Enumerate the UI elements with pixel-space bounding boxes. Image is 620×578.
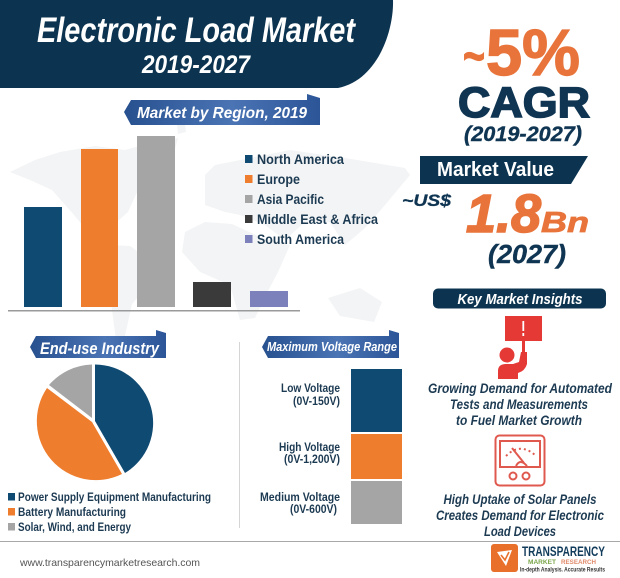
logo subtitle: MARKET <box>528 559 556 566</box>
market value banner: Market Value <box>437 159 554 181</box>
CAGR percentage: 5% <box>486 16 580 89</box>
voltage labels: High Voltage <box>279 440 340 454</box>
legend: end-use industry: Solar, Wind, and Energy <box>18 522 132 534</box>
market value banner <box>420 156 588 184</box>
ribbon: end-use industry <box>30 330 166 358</box>
voltage labels: Medium Voltage <box>260 490 340 504</box>
stacked bar: maximum voltage range <box>351 369 402 524</box>
icon: person holding alert sign <box>498 316 542 379</box>
slice: power supply equipment manufacturing <box>95 364 153 473</box>
ribbon: maximum voltage range: Maximum Voltage Range <box>267 339 397 354</box>
ribbon: market by region: Market by Region, 2019 <box>137 105 307 122</box>
ribbon: maximum voltage range <box>262 330 399 358</box>
insight text: solar panels <box>436 492 604 539</box>
logo: transparency market research <box>491 544 606 574</box>
segment: low voltage <box>351 369 402 432</box>
currency label: ~US$ <box>402 191 452 210</box>
header banner <box>0 0 393 88</box>
segment: medium voltage <box>351 481 402 524</box>
legend: end-use industry: Battery Manufacturing <box>18 507 126 519</box>
insight text: automated tests: to Fuel Market Growth <box>456 413 582 428</box>
segment: high voltage <box>351 434 402 479</box>
ribbon: end-use industry: End-use Industry <box>40 339 160 358</box>
CAGR callout <box>458 16 590 146</box>
slice: solar, wind and energy <box>49 364 92 418</box>
key market insights heading: Key Market Insights <box>458 291 582 308</box>
website url: www.transparencymarketresearch.com <box>19 557 200 569</box>
unit: Bn <box>541 207 589 239</box>
ribbon: market by region <box>124 94 320 125</box>
logo tagline: In-depth Analysis. Accurate Results <box>520 568 606 574</box>
subtitle years: 2019-2027 <box>141 51 251 79</box>
voltage labels: Low Voltage <box>281 381 340 395</box>
legend: regions: Europe <box>257 172 300 187</box>
insight text: automated tests: Tests and Measurements <box>450 397 588 412</box>
voltage labels: (0V-600V) <box>290 502 337 516</box>
legend: end-use industry: Power Supply Equipment Manufacturing <box>18 492 211 504</box>
bar: Middle East and Africa <box>193 282 231 307</box>
legend: regions: Middle East & Africa <box>257 212 378 227</box>
pie chart: end-use industry <box>37 364 153 480</box>
logo mark <box>491 544 518 572</box>
bar: North America <box>24 207 62 307</box>
legend: regions: North America <box>257 152 344 167</box>
bar: Asia Pacific <box>137 136 175 307</box>
bar: South America <box>250 291 288 307</box>
value: 1.8 <box>466 184 541 244</box>
world map background <box>10 116 410 340</box>
legend: regions: South America <box>257 232 344 247</box>
voltage labels <box>260 381 340 516</box>
bar: Europe <box>81 149 118 307</box>
logo subtitle <box>528 559 596 566</box>
icon: analog meter <box>496 436 544 486</box>
CAGR period: (2019-2027) <box>464 123 582 146</box>
legend: regions <box>245 152 378 247</box>
title: Electronic Load Market <box>37 11 356 50</box>
slice: battery manufacturing <box>37 388 122 480</box>
voltage labels: (0V-1,200V) <box>284 452 340 466</box>
legend: regions: Asia Pacific <box>257 192 324 207</box>
insight text: solar panels: Load Devices <box>484 524 556 539</box>
CAGR label: CAGR <box>458 79 590 127</box>
market value figure <box>402 184 589 269</box>
insight text: automated tests <box>428 381 613 428</box>
value year: (2027) <box>488 239 566 269</box>
logo subtitle: RESEARCH <box>561 559 596 566</box>
legend: end-use industry <box>8 492 211 534</box>
bar chart: market by region <box>8 136 300 312</box>
CAGR tilde: ~ <box>463 28 485 84</box>
key market insights heading <box>433 288 606 308</box>
voltage labels: (0V-150V) <box>293 394 340 408</box>
insight text: solar panels: High Uptake of Solar Panels <box>444 492 597 507</box>
